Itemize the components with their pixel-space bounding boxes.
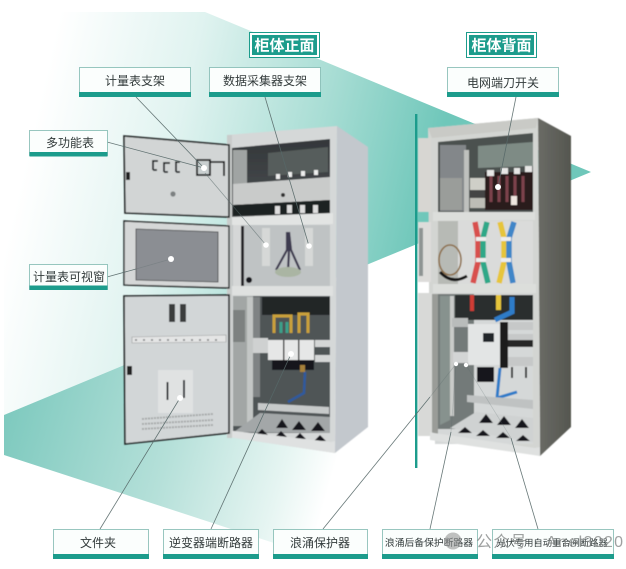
busbars [473, 222, 514, 283]
back cabinet side panel [538, 118, 571, 456]
label: PV auto reclosing breaker [492, 530, 614, 559]
watermark: 公众号 · Anel3020 [476, 533, 623, 551]
front cabinet side panel [335, 126, 368, 453]
front cabinet bottom plate [228, 431, 335, 453]
label: surge protector [273, 530, 368, 559]
back middle shelf [433, 284, 536, 293]
label: grid side knife switch [447, 68, 559, 97]
file holder [158, 370, 193, 413]
coiled wire [439, 245, 467, 280]
middle bay interior [232, 225, 330, 287]
back cable glands [458, 414, 530, 441]
upper back bay [438, 133, 533, 212]
label: multifunction meter: 多功能表 [46, 136, 94, 150]
label: meter bracket [79, 68, 191, 97]
title: cabinet front: 柜体正面 [254, 38, 315, 54]
front cabinet frame [227, 126, 337, 453]
back top cap [428, 118, 538, 138]
label: surge protector: 浪涌保护器 [290, 535, 350, 550]
lower bay interior [233, 296, 330, 433]
background: lower teal wedge [4, 317, 368, 559]
label: meter viewing window: 计量表可视窗 [33, 269, 105, 284]
label: grid side knife switch: 电网端刀开关 [467, 76, 539, 90]
back bottom plate [430, 432, 540, 456]
cable glands [256, 419, 326, 441]
label: meter viewing window [30, 264, 108, 290]
label: file folder: 文件夹 [80, 535, 116, 550]
back door panels [418, 138, 432, 436]
middle door open [124, 221, 229, 288]
wire bundle [275, 232, 301, 277]
back cabinet frame [428, 118, 540, 456]
back upper shelf [433, 212, 535, 221]
back cabinet [418, 118, 571, 456]
label: surge backup breaker: 浪涌后备保护断路器 [385, 536, 473, 549]
upper door open [124, 136, 229, 217]
label: file folder [53, 530, 149, 559]
lower back bay [432, 294, 533, 444]
background: teal wedge pointing right [4, 12, 591, 415]
label: surge backup breaker [382, 530, 478, 559]
upper bay interior [232, 139, 330, 222]
hinge post [227, 135, 232, 438]
marker dots [168, 165, 501, 401]
back breaker [468, 322, 508, 368]
middle shelf [231, 286, 333, 296]
front cabinet [124, 126, 368, 453]
label: PV auto reclosing breaker: 光伏专用自动重合闸断路器 [496, 537, 608, 548]
leader lines [100, 97, 538, 529]
title: cabinet front [250, 32, 320, 58]
middle back bay [438, 221, 533, 284]
title: cabinet back [466, 32, 536, 58]
label: inverter side breaker [163, 530, 259, 559]
viewing window [136, 229, 218, 282]
upper shelf [231, 213, 333, 226]
teal divider bar [415, 114, 417, 468]
label: multifunction meter [30, 130, 108, 156]
label: inverter side breaker: 逆变器端断路器 [169, 535, 253, 550]
label: data collector bracket: 数据采集器支架 [223, 73, 307, 88]
title: cabinet back: 柜体背面 [471, 36, 532, 54]
label: meter bracket: 计量表支架 [105, 74, 165, 88]
multifunction meter [197, 160, 224, 176]
lower door open [124, 295, 229, 444]
label: data collector bracket [209, 68, 321, 97]
